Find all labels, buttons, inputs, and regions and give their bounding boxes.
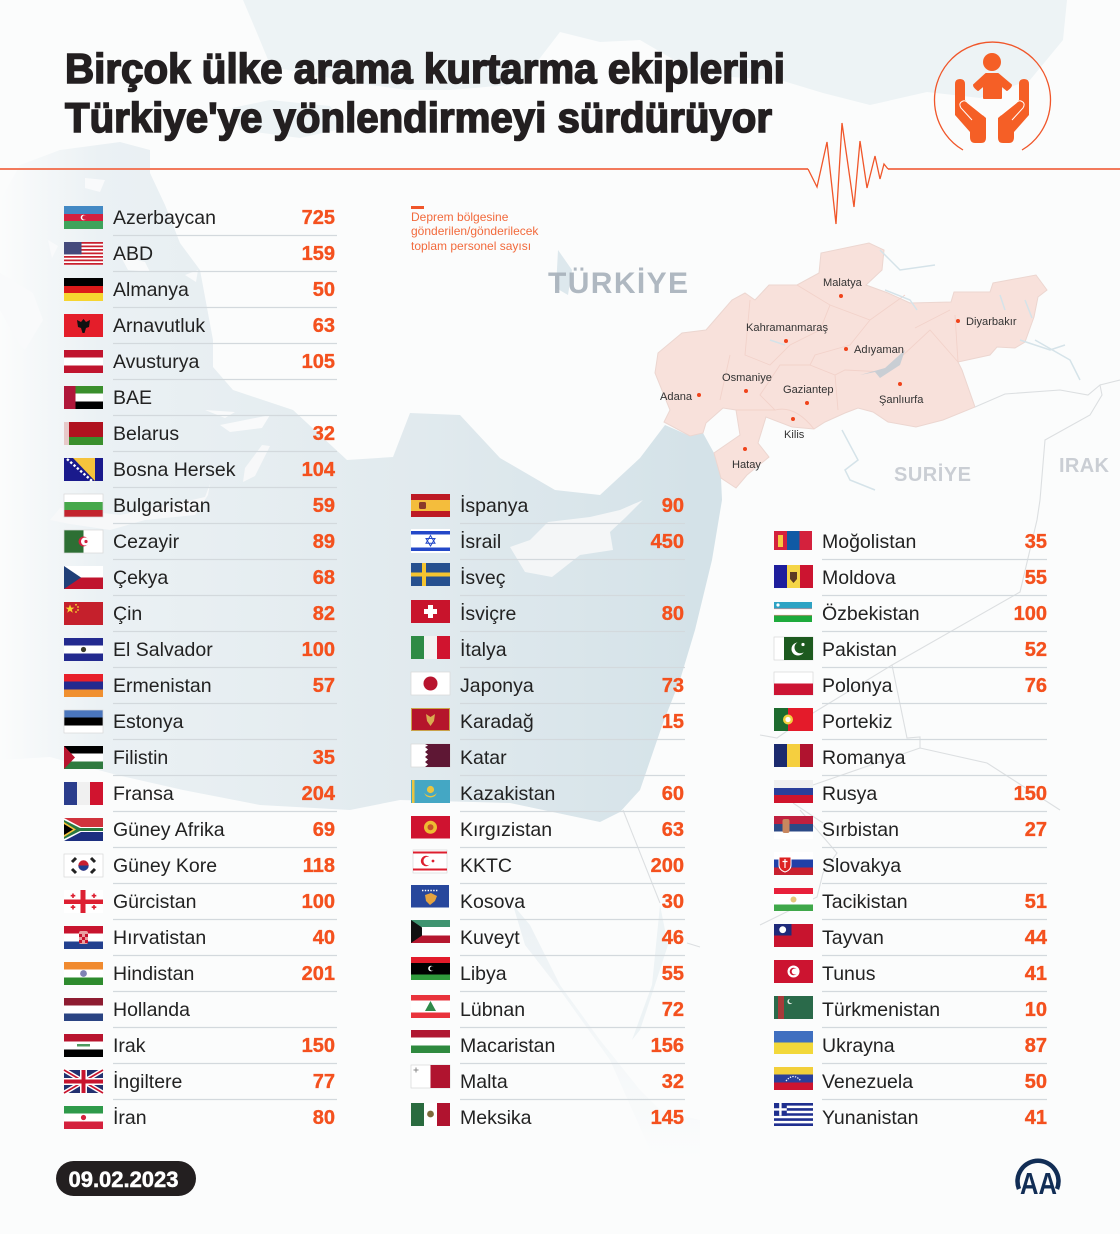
row: Fransa: [64, 782, 337, 812]
row: Meksika: Meksika: [460, 1107, 532, 1129]
row: Japonya: Japonya: [460, 675, 534, 697]
row: Portekiz: [774, 708, 1047, 740]
island: Cyprus: [510, 500, 643, 577]
row: Tunus: 41: [1025, 963, 1047, 985]
row: Polonya: 76: [1025, 675, 1047, 697]
row: Bosna Hersek: 104: [302, 459, 336, 481]
row: Yunanistan: [774, 1103, 1047, 1129]
row: Pakistan: Pakistan: [822, 639, 897, 661]
row: Filistin: Filistin: [113, 747, 168, 769]
row: Özbekistan: Özbekistan: [822, 603, 920, 625]
row: ABD: 159: [302, 243, 335, 265]
AA logo: AA: [1020, 1166, 1057, 1201]
row: Türkmenistan: 10: [1025, 999, 1047, 1021]
date badge: 09.02.2023: [68, 1167, 178, 1192]
row: İspanya: İspanya: [460, 494, 528, 517]
row: Kuveyt: Kuveyt: [460, 927, 520, 949]
row: Kazakistan: 60: [662, 783, 684, 805]
row: İtalya: İtalya: [460, 638, 507, 661]
row: Gürcistan: [64, 890, 337, 920]
row: Hollanda: [64, 998, 337, 1028]
row: Malta: 32: [662, 1071, 684, 1093]
row: Moldova: Moldova: [822, 567, 896, 589]
row: Portekiz: Portekiz: [822, 711, 892, 733]
city: Hatay: [732, 447, 761, 471]
row: Sırbistan: [774, 816, 1047, 848]
legend note: Deprem bölgesine: [411, 210, 509, 224]
row: Karadağ: 15: [662, 711, 684, 733]
row: Kırgızistan: [411, 816, 685, 848]
city: Kilis: Kilis: [784, 429, 805, 441]
row: Güney Afrika: [64, 818, 337, 848]
row: Tunus: [774, 960, 1047, 992]
row: Libya: Libya: [460, 963, 507, 985]
row: Lübnan: Lübnan: [460, 999, 525, 1021]
row: Azerbaycan: 725: [302, 207, 335, 229]
row: Venezuela: [774, 1067, 1047, 1100]
row: İtalya: [411, 636, 685, 668]
row: Hindistan: [64, 962, 337, 992]
row: Moğolistan: 35: [1025, 531, 1047, 553]
row: Avusturya: [64, 350, 337, 380]
row: Fransa: Fransa: [113, 783, 174, 805]
row: Irak: [64, 1034, 337, 1064]
city: Şanlıurfa: [879, 382, 924, 406]
row: Bulgaristan: Bulgaristan: [113, 495, 211, 517]
column 3: [774, 531, 1048, 1129]
row: İngiltere: [64, 1070, 337, 1100]
row: Ukrayna: 87: [1025, 1035, 1047, 1057]
row: Tunus: Tunus: [822, 963, 876, 985]
row: Katar: Katar: [460, 747, 507, 769]
row: İsrail: İsrail: [460, 530, 501, 553]
seismograph line: [0, 123, 1120, 224]
row: Azerbaycan: [64, 206, 337, 236]
city: Kilis: [784, 417, 805, 441]
row: Kuveyt: [411, 920, 685, 956]
row: Meksika: 145: [651, 1107, 684, 1129]
row: İsveç: İsveç: [460, 566, 506, 589]
row: Arnavutluk: 63: [313, 315, 335, 337]
row: KKTC: [413, 850, 685, 884]
island: Rhodes: [243, 445, 270, 482]
row: ABD: ABD: [113, 243, 153, 265]
row: Bulgaristan: 59: [313, 495, 335, 517]
row: Kazakistan: [411, 780, 685, 812]
row: Kırgızistan: Kırgızistan: [460, 819, 552, 841]
row: Yunanistan: 41: [1025, 1107, 1047, 1129]
row: Slovakya: Slovakya: [822, 855, 901, 877]
row: Sırbistan: Sırbistan: [822, 819, 899, 841]
row: Cezayir: Cezayir: [113, 531, 180, 553]
row: Bulgaristan: [64, 494, 337, 524]
icon: hands protecting person: [934, 42, 1050, 150]
row: Romanya: [774, 744, 1047, 776]
row: Libya: 55: [662, 963, 684, 985]
row: Ermenistan: [64, 674, 337, 704]
row: Almanya: 50: [313, 279, 335, 301]
row: Polonya: [774, 672, 1047, 704]
row: Kosova: Kosova: [460, 891, 525, 913]
row: KKTC: KKTC: [460, 855, 512, 877]
column 2: [411, 494, 685, 1129]
row: Macaristan: 156: [651, 1035, 684, 1057]
row: Moldova: 55: [1025, 567, 1047, 589]
row: BAE: BAE: [113, 387, 152, 409]
row: İran: 80: [313, 1107, 335, 1129]
row: Macaristan: Macaristan: [460, 1035, 555, 1057]
row: Bosna Hersek: [64, 458, 337, 488]
row: İsviçre: İsviçre: [460, 602, 516, 625]
row: Güney Afrika: 69: [313, 819, 335, 841]
row: Özbekistan: 100: [1014, 603, 1047, 625]
row: Yunanistan: Yunanistan: [822, 1107, 919, 1129]
row: İran: [64, 1106, 335, 1129]
row: Güney Afrika: Güney Afrika: [113, 819, 225, 841]
row: Hırvatistan: [64, 926, 337, 956]
row: Cezayir: 89: [313, 531, 335, 553]
row: Libya: [411, 957, 685, 992]
city: Malatya: [823, 277, 863, 298]
row: El Salvador: [64, 638, 337, 668]
row: İspanya: 90: [662, 495, 684, 517]
city: Kahramanmaraş: [746, 322, 828, 343]
row: İsviçre: [411, 600, 685, 632]
row: El Salvador: El Salvador: [113, 639, 213, 661]
city: Kahramanmaraş: Kahramanmaraş: [746, 322, 828, 334]
row: Azerbaycan: Azerbaycan: [113, 207, 216, 229]
row: Avusturya: 105: [302, 351, 335, 373]
row: Ukrayna: Ukrayna: [822, 1035, 895, 1057]
row: Moldova: [774, 565, 1047, 596]
legend note: toplam personel sayısı: [411, 239, 531, 253]
row: Arnavutluk: [64, 314, 337, 344]
row: Türkmenistan: Türkmenistan: [822, 999, 940, 1021]
row: Tacikistan: [774, 888, 1047, 920]
date badge: [56, 1161, 196, 1196]
row: Gürcistan: Gürcistan: [113, 891, 196, 913]
row: Irak: 150: [302, 1035, 335, 1057]
city: Gaziantep: [783, 384, 834, 405]
city: Adana: Adana: [660, 391, 693, 403]
row: Çin: [64, 602, 337, 632]
row: Malta: [411, 1065, 685, 1100]
row: Çekya: [64, 566, 337, 596]
row: Çekya: Çekya: [113, 567, 168, 589]
row: Arnavutluk: Arnavutluk: [113, 315, 205, 337]
row: Fransa: 204: [302, 783, 336, 805]
row: Estonya: [64, 710, 337, 740]
row: Karadağ: Karadağ: [460, 711, 534, 733]
row: İngiltere: İngiltere: [113, 1070, 182, 1093]
city: Osmaniye: Osmaniye: [722, 372, 772, 384]
row: Kırgızistan: 63: [662, 819, 684, 841]
row: Venezuela: 50: [1025, 1071, 1047, 1093]
row: Çin: 82: [313, 603, 335, 625]
map label: TÜRKİYE: TÜRKİYE: [548, 267, 688, 300]
row: Venezuela: Venezuela: [822, 1071, 913, 1093]
row: Ukrayna: [774, 1031, 1047, 1064]
row: Tayvan: Tayvan: [822, 927, 884, 949]
row: Kosova: 30: [662, 891, 684, 913]
row: İspanya: [411, 494, 685, 524]
row: Belarus: 32: [313, 423, 335, 445]
city: Gaziantep: Gaziantep: [783, 384, 834, 396]
row: Meksika: [411, 1103, 684, 1129]
row: Lübnan: [411, 995, 685, 1028]
row: Almanya: [64, 278, 337, 308]
row: Karadağ: [412, 708, 685, 740]
row: Filistin: [64, 746, 337, 776]
row: BAE: [64, 386, 337, 416]
row: İran: İran: [113, 1106, 147, 1129]
row: İsviçre: 80: [662, 603, 684, 625]
row: Hindistan: Hindistan: [113, 963, 194, 985]
title: [65, 45, 785, 141]
row: Tayvan: [774, 924, 1048, 956]
row: Belarus: [64, 422, 337, 452]
row: Pakistan: [774, 637, 1047, 668]
row: Cezayir: [64, 530, 337, 560]
row: Türkmenistan: [774, 996, 1047, 1028]
row: Kosova: [411, 885, 685, 920]
row: İsrail: 450: [651, 531, 684, 553]
row: Çekya: 68: [313, 567, 335, 589]
row: Kuveyt: 46: [662, 927, 684, 949]
city: Şanlıurfa: Şanlıurfa: [879, 394, 924, 406]
row: Çin: Çin: [113, 603, 142, 625]
map label: IRAK: IRAK: [1059, 455, 1110, 477]
row: Irak: Irak: [113, 1035, 146, 1057]
column 1: [64, 206, 337, 1129]
row: Özbekistan: [774, 602, 1047, 632]
row: ABD: [64, 242, 337, 272]
row: İngiltere: 77: [313, 1071, 335, 1093]
row: Rusya: [774, 780, 1047, 812]
row: Japonya: [411, 672, 685, 704]
title: Türkiye'ye yönlendirmeyi sürdürüyor: [65, 94, 772, 141]
row: Estonya: Estonya: [113, 711, 184, 733]
row: Hollanda: Hollanda: [113, 999, 190, 1021]
row: Tacikistan: Tacikistan: [822, 891, 908, 913]
row: Romanya: Romanya: [822, 747, 906, 769]
row: KKTC: 200: [651, 855, 684, 877]
row: Tacikistan: 51: [1025, 891, 1047, 913]
row: Pakistan: 52: [1025, 639, 1047, 661]
row: İsrail: [411, 529, 685, 560]
city: Malatya: Malatya: [823, 277, 863, 289]
city: Hatay: Hatay: [732, 459, 761, 471]
row: Tayvan: 44: [1025, 927, 1048, 949]
row: Bosna Hersek: Bosna Hersek: [113, 459, 236, 481]
row: Güney Kore: Güney Kore: [113, 855, 217, 877]
row: Katar: [411, 744, 685, 776]
legend note: gönderilen/gönderilecek: [411, 224, 539, 238]
row: Kazakistan: Kazakistan: [460, 783, 555, 805]
row: Malta: Malta: [460, 1071, 508, 1093]
row: Japonya: 73: [662, 675, 684, 697]
row: Belarus: Belarus: [113, 423, 179, 445]
row: Rusya: 150: [1014, 783, 1047, 805]
row: Macaristan: [411, 1030, 685, 1064]
city: Diyarbakır: Diyarbakır: [966, 316, 1017, 328]
row: Gürcistan: 100: [302, 891, 335, 913]
row: Polonya: Polonya: [822, 675, 893, 697]
island: Crete: [50, 484, 210, 530]
row: Almanya: Almanya: [113, 279, 189, 301]
row: Slovakya: [774, 852, 1047, 884]
row: Moğolistan: [774, 531, 1047, 560]
row: Güney Kore: [64, 854, 337, 884]
row: Rusya: Rusya: [822, 783, 877, 805]
city: Adıyaman: Adıyaman: [854, 344, 904, 356]
quake zone: [655, 243, 1047, 488]
row: Lübnan: 72: [662, 999, 684, 1021]
map label: SURİYE: SURİYE: [894, 463, 971, 486]
row: Moğolistan: Moğolistan: [822, 531, 916, 553]
row: Hırvatistan: 40: [313, 927, 335, 949]
row: Hindistan: 201: [302, 963, 335, 985]
title: Birçok ülke arama kurtarma ekiplerini: [65, 45, 785, 92]
city: Osmaniye: [722, 372, 772, 393]
row: Hırvatistan: Hırvatistan: [113, 927, 206, 949]
row: Filistin: 35: [313, 747, 335, 769]
row: Sırbistan: 27: [1025, 819, 1047, 841]
row: İsveç: [411, 563, 685, 596]
row: Avusturya: Avusturya: [113, 351, 200, 373]
row: Ermenistan: 57: [313, 675, 335, 697]
legend note: [411, 206, 539, 253]
row: El Salvador: 100: [302, 639, 335, 661]
row: Ermenistan: Ermenistan: [113, 675, 212, 697]
row: Güney Kore: 118: [303, 855, 335, 877]
